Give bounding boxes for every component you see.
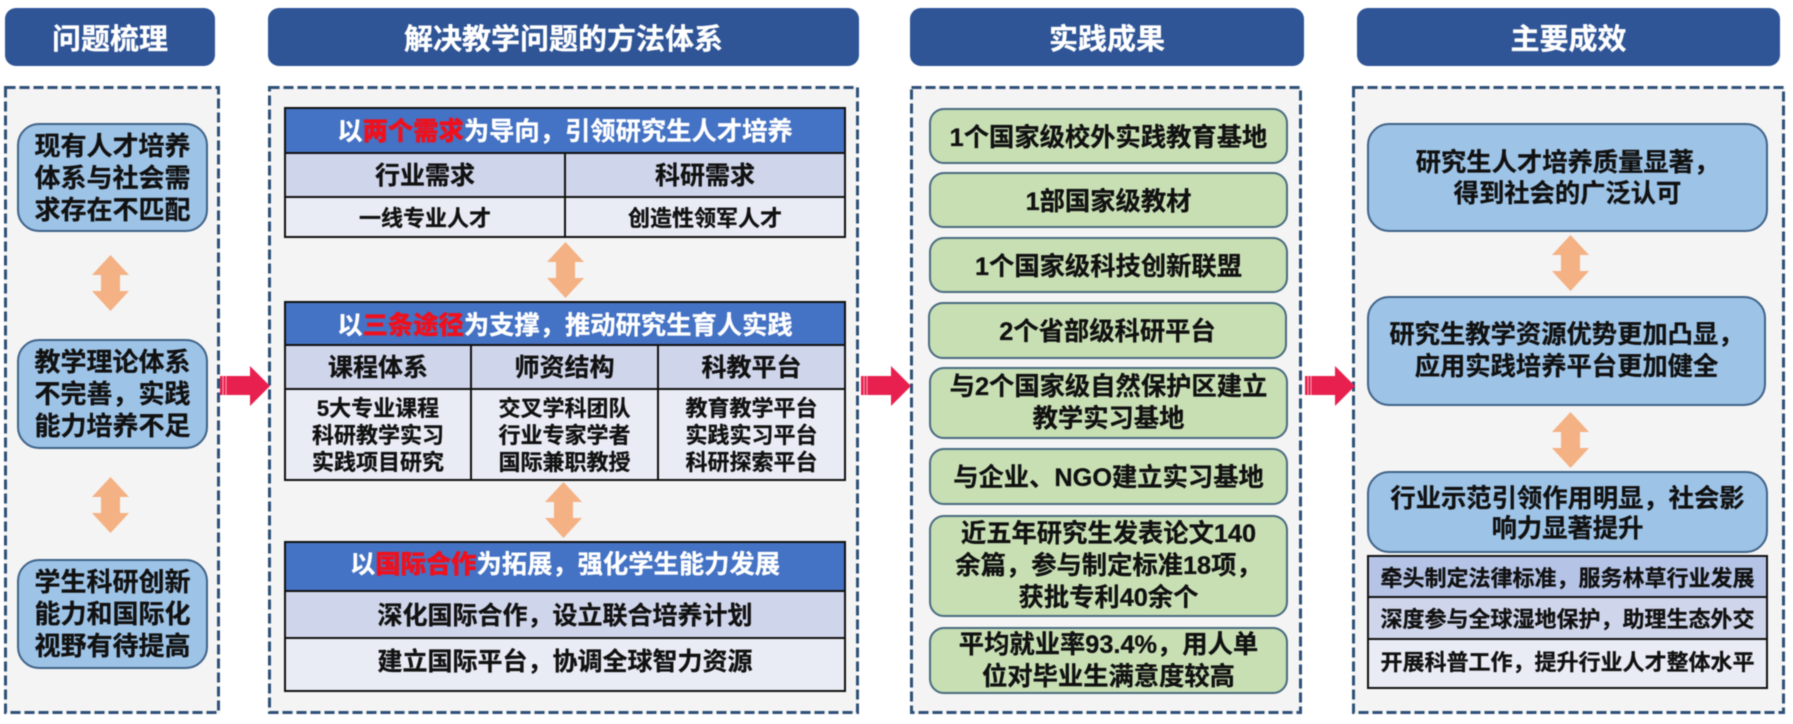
cell: 课程体系: 课程体系	[328, 354, 428, 382]
row: 深度参与: 深度参与全球湿地保护，助理生态外交	[1380, 607, 1754, 632]
row: 建立国际平台	[284, 637, 846, 692]
icon: double arrow table 1-2	[546, 242, 584, 298]
panel: 方法体系	[268, 86, 859, 714]
result box 1	[929, 108, 1288, 164]
cell: 课程内容: 科研教学实习	[312, 423, 444, 448]
result box 6: 与企业、NGO建立实习基地	[953, 464, 1264, 492]
problem box 2: 能力培养不足	[34, 411, 190, 441]
cell: 课程内容	[284, 388, 472, 481]
result box 5	[929, 367, 1288, 439]
cell: 一线专业人才	[284, 196, 566, 238]
icon: double arrow problem 2-3	[92, 476, 130, 534]
table header: 三条途径	[363, 312, 464, 340]
problem box 3: 学生科研创新	[34, 567, 190, 597]
cell: 师资结构	[470, 344, 659, 390]
table header: 以 为拓展，强化学生能力发展	[350, 550, 780, 578]
row: 建立国际平台: 建立国际平台，协调全球智力资源	[377, 648, 752, 676]
result box 7	[929, 515, 1288, 617]
problem box 1	[17, 123, 208, 232]
row: 开展科普	[1367, 638, 1768, 689]
problem box 2	[17, 339, 208, 449]
effect box 2	[1367, 296, 1766, 406]
effect box 2: 研究生教学资源优势更加凸显，	[1389, 321, 1744, 349]
cell: 师资内容: 国际兼职教授	[498, 450, 630, 475]
problem box 3: 能力和国际化	[34, 599, 190, 629]
panel: 主要成效	[1352, 86, 1785, 714]
heading: 问题梳理: 问题梳理	[52, 24, 168, 56]
cell: 平台内容: 实践实习平台	[685, 423, 818, 448]
arrow: results to effects	[1304, 366, 1356, 406]
problem box 1: 求存在不匹配	[34, 194, 190, 224]
cell: 师资结构: 师资结构	[514, 354, 614, 382]
result box 4	[928, 302, 1287, 359]
cell: 创造性领军人才	[564, 196, 846, 238]
table: 三条途径	[283, 300, 847, 482]
result box 8: 位对毕业生满意度较高	[982, 662, 1235, 690]
cell: 师资内容: 行业专家学者	[498, 423, 630, 448]
cell: 平台内容: 教育教学平台	[685, 396, 818, 421]
cell: 行业需求: 行业需求	[375, 162, 475, 190]
cell: 科教平台: 科教平台	[701, 354, 802, 382]
result box 5: 与2个国家级自然保护区建立	[950, 373, 1267, 401]
result box 8	[929, 627, 1288, 694]
cell: 课程内容: 5大专业课程	[317, 396, 439, 421]
problem box 3: 视野有待提高	[34, 631, 190, 661]
result box 8: 平均就业率93.4%，用人单	[959, 630, 1258, 658]
effect box 3	[1367, 471, 1768, 553]
cell: 课程体系	[284, 344, 472, 390]
problem box 3	[17, 559, 208, 669]
problem box 1: 体系与社会需	[34, 162, 190, 192]
panel: 问题梳理	[4, 86, 220, 714]
result box 6	[929, 448, 1288, 505]
cell: 科研需求	[564, 152, 846, 198]
result box 2: 1部国家级教材	[1026, 188, 1191, 216]
effect box 3: 行业示范引领作用明显，社会影	[1390, 485, 1745, 513]
table: 行业影响	[1366, 554, 1769, 690]
table header	[284, 301, 846, 346]
arrow: problem to method	[219, 366, 270, 406]
cell: 师资内容	[470, 388, 659, 481]
problem box 2: 教学理论体系	[34, 347, 190, 377]
effect box 1: 研究生人才培养质量显著，	[1416, 149, 1719, 177]
effect box 1: 得到社会的广泛认可	[1454, 180, 1681, 208]
table header: 两个需求	[363, 118, 464, 146]
result box 3	[929, 237, 1288, 293]
row: 牵头制定: 牵头制定法律标准，服务林草行业发展	[1380, 566, 1754, 590]
result box 1: 1个国家级校外实践教育基地	[950, 124, 1267, 152]
heading: 实践成果	[910, 8, 1304, 66]
panel: 实践成果	[910, 86, 1302, 714]
effect box 3: 响力显著提升	[1492, 515, 1643, 543]
result box 2	[929, 172, 1288, 228]
table header: 国际合作	[375, 550, 476, 578]
table header	[284, 107, 846, 154]
cell: 行业需求	[284, 152, 566, 198]
cell: 课程内容: 实践项目研究	[312, 450, 444, 475]
heading: 问题梳理	[5, 8, 215, 66]
result box 7: 近五年研究生发表论文140	[961, 520, 1256, 548]
cell: 科教平台	[657, 344, 846, 390]
result box 7: 余篇，参与制定标准18项，	[955, 552, 1262, 580]
cell: 科研需求: 科研需求	[655, 162, 755, 190]
heading: 主要成效: 主要成效	[1510, 24, 1626, 56]
table header	[284, 541, 846, 592]
heading: 解决教学问题的方法体系: 解决教学问题的方法体系	[404, 24, 723, 56]
result box 5: 教学实习基地	[1033, 405, 1184, 433]
icon: double arrow effect 1-2	[1552, 234, 1590, 292]
icon: double arrow table 2-3	[544, 482, 582, 538]
table: 国际合作	[283, 540, 847, 693]
table header: 以 为支撑，推动研究生育人实践	[337, 312, 793, 340]
row: 深度参与	[1367, 596, 1768, 640]
result box 3: 1个国家级科技创新联盟	[975, 252, 1242, 280]
cell: 平台内容	[657, 388, 846, 481]
icon: double arrow problem 1-2	[92, 254, 130, 312]
problem box 2: 不完善，实践	[34, 379, 190, 409]
cell: 创造性领军人才: 创造性领军人才	[628, 206, 782, 231]
table: 两个需求	[283, 106, 847, 239]
row: 牵头制定	[1367, 555, 1768, 598]
result box 4: 2个省部级科研平台	[999, 318, 1216, 346]
table header: 以 为导向，引领研究生人才培养	[337, 118, 793, 146]
arrow: method to results	[860, 366, 912, 406]
icon: double arrow effect 2-3	[1552, 412, 1590, 468]
heading: 主要成效	[1357, 8, 1780, 66]
result box 7: 获批专利40余个	[1019, 584, 1198, 612]
heading: 解决教学问题的方法体系	[268, 8, 859, 66]
cell: 一线专业人才: 一线专业人才	[359, 206, 491, 231]
cell: 师资内容: 交叉学科团队	[498, 396, 630, 421]
cell: 平台内容: 科研探索平台	[685, 450, 818, 475]
row: 开展科普: 开展科普工作，提升行业人才整体水平	[1380, 650, 1754, 675]
row: 深化国际合作	[284, 590, 846, 639]
effect box 1	[1367, 123, 1768, 232]
heading: 实践成果: 实践成果	[1049, 24, 1165, 56]
problem box 1: 现有人才培养	[34, 130, 190, 160]
row: 深化国际合作: 深化国际合作，设立联合培养计划	[377, 602, 752, 630]
effect box 2: 应用实践培养平台更加健全	[1415, 353, 1718, 381]
